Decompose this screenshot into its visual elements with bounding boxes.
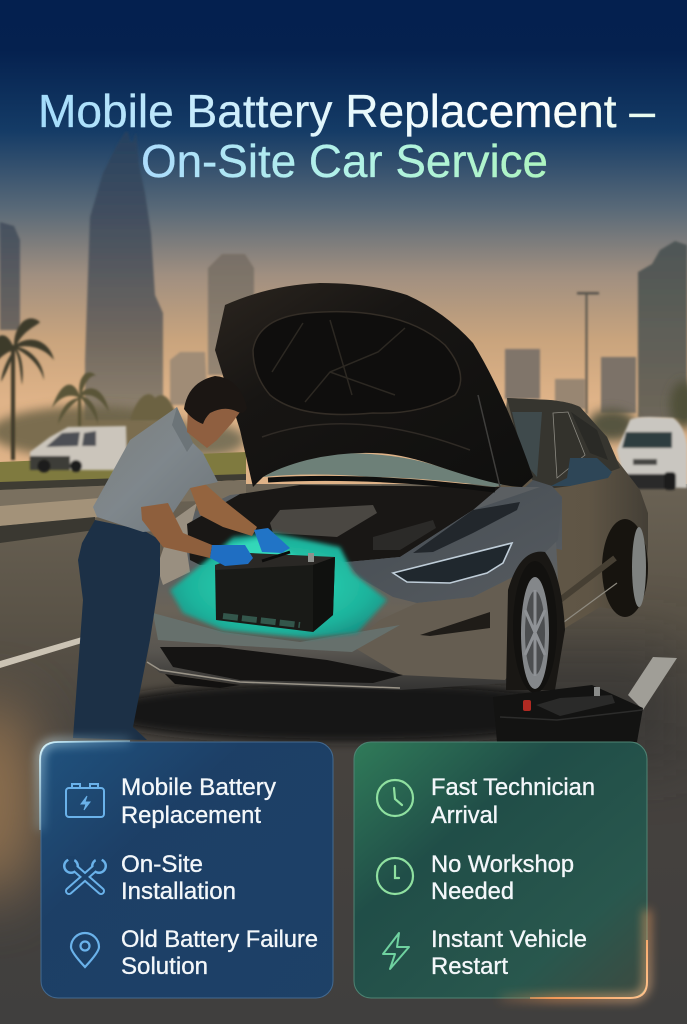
wipers <box>268 478 495 490</box>
car rear body and roof <box>490 398 648 640</box>
teal battery glow <box>170 533 387 638</box>
text: on-site installation: Installation <box>121 878 236 905</box>
spare battery <box>493 685 643 742</box>
text: instant vehicle restart <box>431 926 587 980</box>
side mirror <box>551 458 612 486</box>
nose panel <box>347 487 562 603</box>
near arm <box>141 503 212 558</box>
palm trees <box>0 318 178 460</box>
open hood <box>215 283 533 487</box>
left fender highlight <box>157 503 197 585</box>
text: old battery failure solution <box>121 926 318 980</box>
icon: battery <box>66 784 104 817</box>
shirt <box>93 407 218 532</box>
collar <box>172 407 193 452</box>
icon: crossed wrenches <box>63 856 107 891</box>
white van left <box>30 426 127 472</box>
back arm <box>190 484 257 536</box>
neck and face <box>187 400 240 448</box>
panel: left services <box>40 741 333 998</box>
background sky <box>0 0 687 500</box>
headlight <box>393 543 512 583</box>
engine cover <box>270 505 377 537</box>
text: old battery failure solution: Old Battery Failure <box>121 926 318 953</box>
trousers <box>73 520 160 740</box>
technician <box>73 376 290 740</box>
rear wheel <box>602 519 648 617</box>
icon: lightning bolt <box>383 933 409 969</box>
car front body <box>147 453 565 693</box>
text: fast technician arrival: Arrival <box>431 802 498 829</box>
ground, road and grass <box>0 452 687 1024</box>
text: mobile battery replacement <box>121 774 276 829</box>
title: On-Site Car Service <box>141 135 548 187</box>
bronze bumper <box>350 570 527 680</box>
text: instant vehicle restart: Instant Vehicle <box>431 926 587 953</box>
text: instant vehicle restart: Restart <box>431 953 508 980</box>
windshield reflection <box>263 453 507 487</box>
wheel arch and front wheel <box>506 552 565 690</box>
blue gloves <box>210 545 253 566</box>
hood scoop shadow <box>413 502 520 553</box>
text: fast technician arrival <box>431 774 595 829</box>
hazy trees behind road <box>0 381 687 458</box>
text: no workshop needed: Needed <box>431 878 514 905</box>
icon: clock two <box>377 858 413 894</box>
side vent <box>420 612 490 636</box>
white van right <box>617 417 687 490</box>
car battery <box>215 552 335 632</box>
icon: clock one <box>377 780 413 816</box>
lower lip <box>147 662 400 688</box>
text: mobile battery replacement: Mobile Battery <box>121 774 276 801</box>
title: Mobile Battery Replacement – <box>38 85 655 137</box>
hair <box>184 376 247 424</box>
text: no workshop needed <box>431 851 574 905</box>
panel: right benefits <box>354 742 647 998</box>
text: no workshop needed: No Workshop <box>431 851 574 878</box>
icon: location pin <box>71 933 99 967</box>
title <box>38 85 655 187</box>
lower bumper band <box>153 613 400 652</box>
text: on-site installation: On-Site <box>121 851 203 878</box>
text: old battery failure solution: Solution <box>121 953 208 980</box>
engine bay <box>187 485 500 565</box>
rocker line <box>553 583 617 630</box>
front grille <box>160 647 403 683</box>
text: on-site installation <box>121 851 236 905</box>
text: mobile battery replacement: Replacement <box>121 802 261 829</box>
text: fast technician arrival: Fast Technician <box>431 774 595 801</box>
skyline buildings <box>0 132 687 420</box>
